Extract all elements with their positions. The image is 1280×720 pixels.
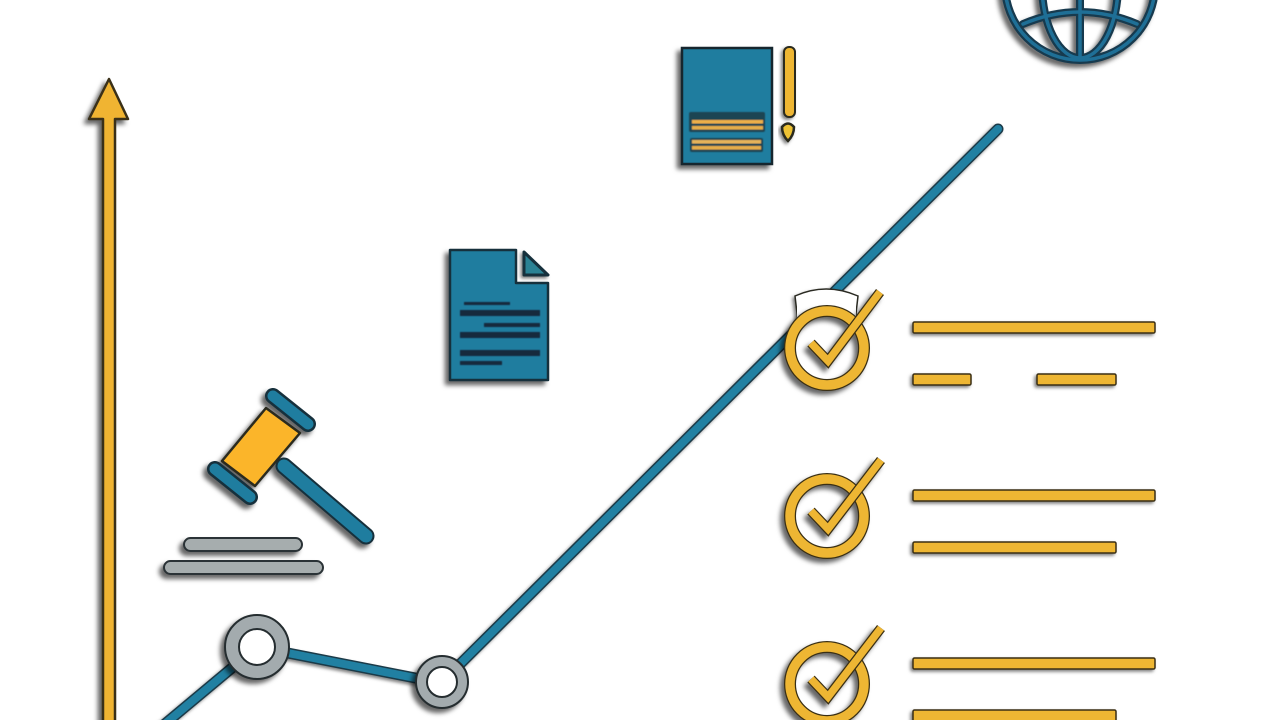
chart node: gray ring large [225,615,289,679]
vertical axis arrow [89,79,128,720]
gavel caps [215,396,308,497]
check icon 3 [790,628,881,720]
document page [450,250,548,380]
document text lines [460,302,540,365]
folded corner [524,252,548,275]
rising trend line [160,129,998,720]
chart node: gray ring small [416,656,468,708]
book cover [682,48,772,164]
check icon 1 [790,292,880,385]
book title lines [689,112,765,152]
gavel head [222,408,300,486]
gavel icon [215,396,366,536]
checklist row 3 lines [913,658,1155,720]
gavel handle [284,466,366,536]
checklist row 2 lines [913,490,1155,553]
document icon [450,250,548,380]
book icon [682,48,772,164]
gavel base bars [164,538,323,574]
pen icon [782,47,795,141]
white cap behind first check [794,289,860,381]
checklist row 1 lines [913,322,1155,385]
globe icon [1005,0,1155,60]
check icon 2 [790,460,881,553]
